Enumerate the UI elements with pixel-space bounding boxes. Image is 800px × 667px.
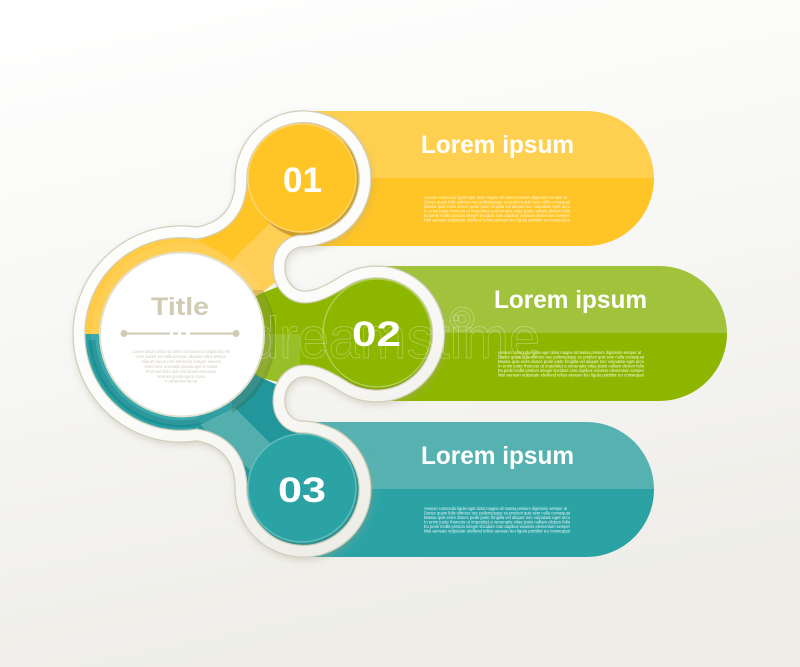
text block: teal bar xyxy=(424,506,571,534)
panel: connected circles shape xyxy=(70,110,450,560)
text block: teal bar: Eu pede mollis pretium integer tincidunt cras dapibus vivamus elementum semper xyxy=(424,524,571,529)
text block: green bar: Eu pede mollis pretium integer tincidunt cras dapibus vivamus elementum semper xyxy=(498,368,645,373)
text block: teal bar: Nisi aenean vulputate eleifend tellus aenean leo ligula porttitor eu consequat xyxy=(424,528,571,534)
yellow segment xyxy=(86,123,358,334)
heading: green bar: Lorem ipsum xyxy=(494,286,647,314)
text block: green bar: Aenean commodo ligula eget dolor magna sit massa pretium dignissim semper at xyxy=(498,350,642,355)
centre text block: Venenatis gravida eget et massa xyxy=(157,374,205,379)
circle 01 xyxy=(248,124,356,232)
text block: yellow bar: In enim justo rhoncus ut imperdiet a venenatis vitae justo nullam dictum felis xyxy=(424,208,570,214)
divider ornament xyxy=(120,330,240,337)
heading: yellow bar: Lorem ipsum xyxy=(421,131,574,159)
panel: teal bar 03 xyxy=(303,422,654,557)
circle shadow 03 xyxy=(264,450,358,545)
circle shadow 02 xyxy=(334,334,432,390)
text block: yellow bar: Eu pede mollis pretium integer tincidunt cras dapibus vivamus elementum semper xyxy=(424,213,571,218)
text block: yellow bar: Nisi aenean vulputate eleifend tellus aenean leo ligula porttitor eu consequat xyxy=(424,218,571,222)
heading: teal bar: Lorem ipsum xyxy=(421,442,574,470)
text block: green bar: Nisi aenean vulputate eleifend tellus aenean leo ligula porttitor eu consequat xyxy=(498,372,645,378)
text block: teal bar: Donec quam felis ultricies nec pellentesque eu pretium quis sem nulla consequat xyxy=(424,510,571,516)
watermark: dreamstime xyxy=(248,306,540,371)
centre text block: Proin sed dolor quis erat dictum maecenas xyxy=(146,369,216,374)
centre title circle xyxy=(100,252,264,416)
text block: yellow bar: Aenean commodo ligula eget dolor magna sit massa pretium dignissim semper at xyxy=(424,195,568,200)
circle 03 xyxy=(248,434,356,542)
centre text block: Aliquet lacus non vehicula integer viverra xyxy=(141,359,222,364)
centre text block: Cras auctor vel nulla posuere aliquam tellus tempor xyxy=(136,354,227,359)
panel: yellow bar 01 xyxy=(303,111,654,246)
centre text block: Justo nunc venenatis gravida eget et massa xyxy=(144,364,218,369)
green segment xyxy=(255,278,432,390)
circle 02 xyxy=(323,279,431,387)
number 03: 03 xyxy=(278,471,326,510)
inner ring around main circle xyxy=(91,243,273,425)
text block: green bar: Donec quam felis ultricies nec pellentesque eu pretium quis sem nulla consequat xyxy=(498,354,645,360)
centre text block xyxy=(132,349,231,384)
text block: green bar xyxy=(498,350,645,378)
inner dark arc in teal ring xyxy=(92,340,200,424)
text block: yellow bar: Massa quis enim donec pede justo fringilla vel aliquet nec vulputate eget arcu xyxy=(424,204,571,209)
number 01: 01 xyxy=(283,161,322,200)
text block: teal bar: Massa quis enim donec pede justo fringilla vel aliquet nec vulputate eget arcu xyxy=(424,515,571,520)
text block: green bar: In enim justo rhoncus ut imperdiet a venenatis vitae justo nullam dictum felis xyxy=(498,364,644,368)
number 02: 02 xyxy=(352,315,401,354)
title: Title xyxy=(151,293,209,321)
text block: yellow bar: Donec quam felis ultricies nec pellentesque eu pretium quis sem nulla consequat xyxy=(424,200,571,204)
centre text block: Lorem ipsum dolor sit amet consectetur adipiscing elit xyxy=(132,349,231,354)
text block: green bar: Massa quis enim donec pede justo fringilla vel aliquet nec vulputate eget arcu xyxy=(498,359,645,364)
circle shadow 01 xyxy=(264,140,359,236)
teal segment xyxy=(86,334,358,545)
shadow of main circle xyxy=(232,290,276,413)
text block: teal bar: Aenean commodo ligula eget dolor magna sit massa pretium dignissim semper at xyxy=(424,506,568,511)
centre text block: In pharetra lacus xyxy=(165,378,197,384)
text block: yellow bar xyxy=(424,195,571,222)
panel: green bar 02 xyxy=(377,266,727,401)
text block: teal bar: In enim justo rhoncus ut imperdiet a venenatis vitae justo nullam dictum felis xyxy=(424,520,570,524)
